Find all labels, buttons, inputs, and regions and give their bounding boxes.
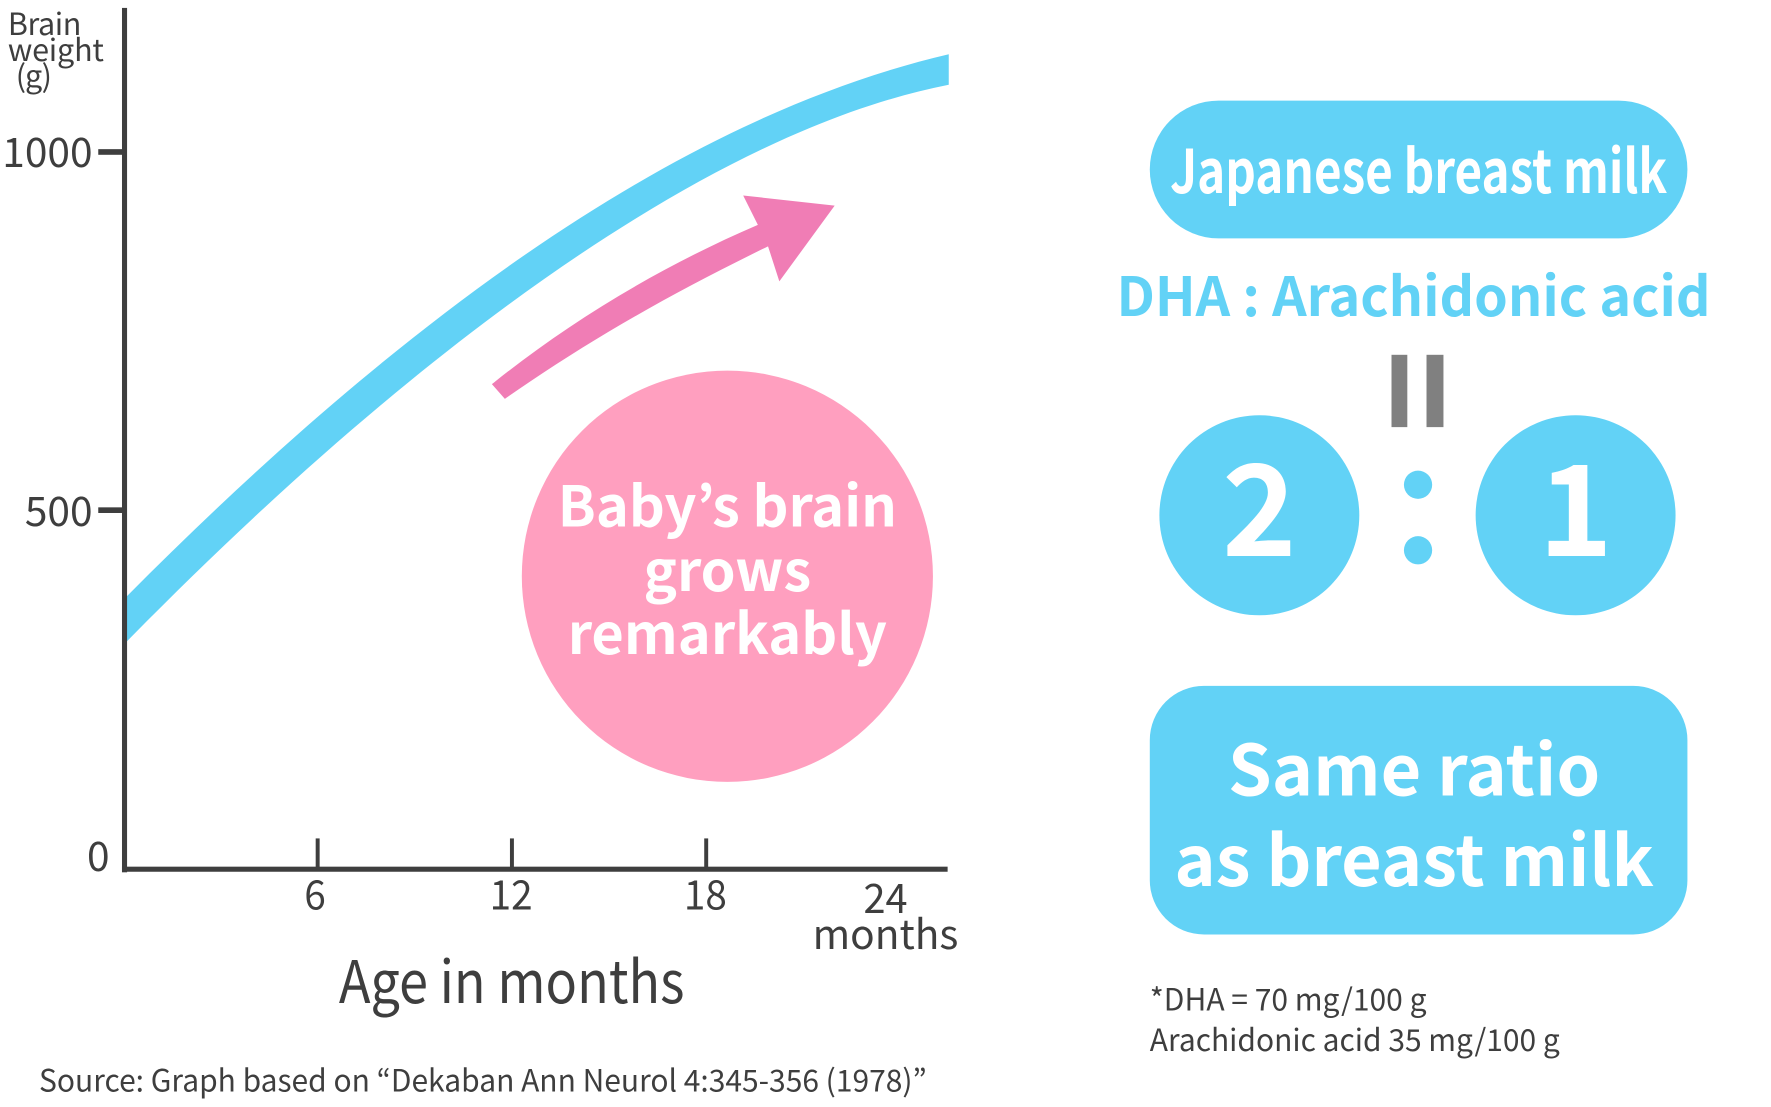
pink circle callout: Baby’s brain <box>558 463 897 544</box>
same ratio box <box>1150 686 1687 934</box>
footnote <box>1150 976 1560 1060</box>
equals sign <box>1392 355 1443 427</box>
ratio circle 1 <box>1476 410 1676 615</box>
pink circle callout <box>522 371 933 782</box>
x axis labels: 18 <box>684 863 727 922</box>
x axis labels <box>304 863 958 961</box>
y axis labels: 1000 <box>2 120 93 179</box>
y axis labels: 0 <box>87 824 110 883</box>
x axis with ticks <box>122 838 948 872</box>
ratio subtitle: DHA : Arachidonic acid <box>1116 253 1711 332</box>
pink arrow <box>492 195 835 399</box>
x axis labels: months <box>813 902 958 961</box>
y axis title: Brain <box>8 0 81 44</box>
y axis title <box>8 0 104 96</box>
pill heading <box>1150 101 1687 238</box>
x axis labels: 6 <box>304 863 326 922</box>
x axis labels: 24 <box>863 866 908 925</box>
y axis title: (g) <box>16 52 52 96</box>
same ratio box: Same ratio <box>1228 715 1600 816</box>
growth curve band <box>124 54 949 644</box>
y axis labels: 500 <box>25 479 93 538</box>
ratio circle 1: 1 <box>1538 410 1613 593</box>
ratio circle 2 <box>1159 410 1359 615</box>
x axis title: Age in months <box>339 935 684 1020</box>
y axis labels <box>2 120 110 883</box>
footnote: Arachidonic acid 35 mg/100 g <box>1150 1016 1560 1060</box>
y axis with ticks <box>98 8 127 872</box>
ratio circle 2: 2 <box>1222 410 1297 593</box>
pink circle callout: grows <box>644 527 811 608</box>
x axis labels: 12 <box>490 863 533 922</box>
ratio colon <box>1404 471 1432 564</box>
y axis title: weight <box>8 26 104 70</box>
footnote: *DHA = 70 mg/100 g <box>1150 976 1427 1020</box>
same ratio box: as breast milk <box>1174 806 1654 907</box>
source note: Source: Graph based on “Dekaban Ann Neurol 4:345-356 (1978)” <box>39 1057 927 1101</box>
pink circle callout: remarkably <box>568 590 887 671</box>
